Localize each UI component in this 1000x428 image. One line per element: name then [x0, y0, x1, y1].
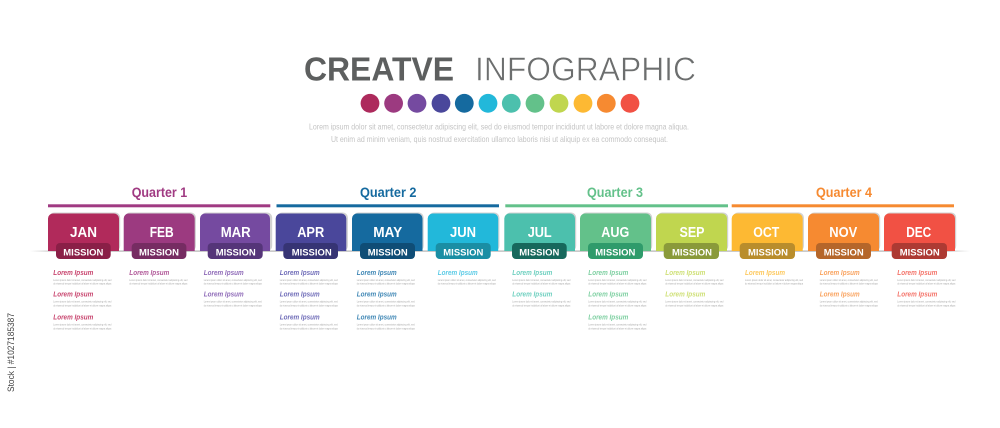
panel: May	[352, 212, 424, 330]
text block: Lorem Ipsum	[357, 268, 397, 277]
text block: do eiusmod tempor incididunt ut labore et dolore magna aliqua	[204, 303, 262, 307]
text block: Lorem Ipsum	[280, 312, 320, 322]
text block: Lorem Ipsum	[665, 268, 706, 277]
text block	[512, 290, 571, 307]
mission badge: MISSION	[292, 248, 332, 259]
month card	[124, 212, 196, 251]
text block: Lorem ipsum dolor sit amet, consectetur adipiscing elit, sed	[53, 323, 112, 327]
text block	[280, 290, 338, 307]
panel: August	[580, 212, 652, 330]
text block: Lorem ipsum dolor sit amet, consectetur adipiscing elit, sed	[745, 278, 803, 282]
text block	[204, 290, 262, 307]
intro paragraph: Ut enim ad minim veniam, quis nostrud exercitation ullamco laboris nisi ut aliquip ex ea commodo consequat.	[331, 134, 668, 144]
mission badge: MISSION	[824, 248, 864, 259]
panel: July	[504, 212, 576, 307]
text block: do eiusmod tempor incididunt ut labore et dolore magna aliqua	[357, 326, 415, 330]
text block: Lorem Ipsum	[357, 290, 397, 298]
text block: do eiusmod tempor incididunt ut labore et dolore magna aliqua	[280, 303, 338, 307]
text block: Lorem ipsum dolor sit amet, consectetur adipiscing elit, sed	[512, 300, 571, 304]
text block: do eiusmod tempor incididunt ut labore et dolore magna aliqua	[897, 282, 956, 286]
month card	[428, 212, 499, 251]
quarter 4 heading: Quarter 4	[816, 184, 872, 200]
text block: do eiusmod tempor incididunt ut labore et dolore magna aliqua	[204, 282, 262, 286]
text block: Lorem Ipsum	[53, 290, 94, 298]
text block: Lorem Ipsum	[357, 312, 397, 322]
text block	[820, 268, 878, 286]
text block	[129, 268, 188, 286]
quarter 4 heading	[732, 184, 954, 207]
text block: Lorem Ipsum	[204, 290, 244, 298]
month name: OCT	[753, 225, 779, 241]
text block: Lorem ipsum dolor sit amet, consectetur adipiscing elit, sed	[129, 278, 188, 282]
text block: do eiusmod tempor incididunt ut labore et dolore magna aliqua	[53, 326, 112, 330]
text block: Lorem ipsum dolor sit amet, consectetur adipiscing elit, sed	[204, 278, 262, 282]
text block: Lorem Ipsum	[512, 290, 553, 298]
text block: do eiusmod tempor incididunt ut labore et dolore magna aliqua	[665, 303, 724, 307]
mission badge: MISSION	[139, 248, 179, 259]
month name: JUL	[528, 225, 552, 241]
text block: Lorem Ipsum	[588, 268, 629, 277]
text block	[588, 312, 647, 330]
text block: Lorem ipsum dolor sit amet, consectetur adipiscing elit, sed	[588, 278, 647, 282]
text block: Lorem ipsum dolor sit amet, consectetur adipiscing elit, sed	[53, 278, 112, 282]
month card	[732, 212, 804, 251]
text block: Lorem Ipsum	[438, 268, 478, 277]
text block: Lorem Ipsum	[53, 268, 94, 277]
text block	[357, 268, 415, 286]
text block: Lorem ipsum dolor sit amet, consectetur adipiscing elit, sed	[53, 300, 112, 304]
text block	[357, 312, 415, 330]
month name: JAN	[70, 225, 97, 241]
month name: DEC	[906, 225, 931, 241]
text block: Lorem Ipsum	[588, 290, 629, 298]
month card	[200, 212, 272, 251]
text block	[665, 268, 724, 286]
text block	[357, 290, 415, 307]
text block: do eiusmod tempor incididunt ut labore et dolore magna aliqua	[53, 282, 112, 286]
panel: June	[428, 212, 499, 286]
month name: MAR	[221, 225, 251, 241]
month card	[884, 212, 956, 251]
month name: JUN	[450, 225, 476, 241]
quarter 1 heading	[48, 184, 270, 207]
intro paragraph	[309, 122, 689, 144]
text block	[53, 290, 112, 307]
panel: December	[884, 212, 956, 307]
text block: Lorem ipsum dolor sit amet, consectetur adipiscing elit, sed	[438, 278, 496, 282]
quarter 2 heading	[276, 184, 499, 207]
month card	[580, 212, 652, 251]
text block: Lorem ipsum dolor sit amet, consectetur adipiscing elit, sed	[204, 300, 262, 304]
text block: do eiusmod tempor incididunt ut labore et dolore magna aliqua	[357, 303, 415, 307]
month name: MAY	[373, 225, 403, 241]
month card	[504, 212, 576, 251]
mission badge: MISSION	[63, 248, 103, 259]
text block	[820, 290, 878, 307]
text block: do eiusmod tempor incididunt ut labore et dolore magna aliqua	[357, 282, 415, 286]
text block: Lorem ipsum dolor sit amet, consectetur adipiscing elit, sed	[357, 323, 415, 327]
mission badge: MISSION	[368, 248, 408, 259]
text block	[53, 268, 112, 286]
text block: do eiusmod tempor incididunt ut labore et dolore magna aliqua	[280, 282, 338, 286]
intro paragraph: Lorem ipsum dolor sit amet, consectetur adipiscing elit, sed do eiusmod tempor incididunt ut labore et dolore magna aliqua.	[309, 122, 689, 132]
stock image credit: Stock | #1027185387	[5, 313, 16, 392]
title	[304, 51, 696, 88]
text block	[512, 268, 571, 286]
text block: Lorem Ipsum	[280, 268, 320, 277]
mission badge: MISSION	[672, 248, 712, 259]
panel: October	[732, 212, 804, 286]
text block	[438, 268, 496, 286]
panel: September	[656, 212, 728, 307]
text block: do eiusmod tempor incididunt ut labore et dolore magna aliqua	[512, 282, 571, 286]
month name: SEP	[680, 225, 705, 241]
text block: Lorem Ipsum	[820, 268, 860, 277]
text block: do eiusmod tempor incididunt ut labore et dolore magna aliqua	[438, 282, 496, 286]
text block: Lorem Ipsum	[512, 268, 553, 277]
panel: February	[124, 212, 196, 286]
text block: Lorem ipsum dolor sit amet, consectetur adipiscing elit, sed	[588, 300, 647, 304]
text block: Lorem ipsum dolor sit amet, consectetur adipiscing elit, sed	[357, 278, 415, 282]
text block	[280, 312, 338, 330]
colour dots row	[361, 94, 639, 113]
quarter 2 heading: Quarter 2	[360, 184, 417, 200]
month card	[276, 212, 348, 251]
timeline baseline	[30, 250, 970, 252]
text block: Lorem Ipsum	[129, 268, 170, 277]
month card	[352, 212, 424, 251]
text block: Lorem Ipsum	[897, 268, 938, 277]
text block	[588, 290, 647, 307]
text block	[665, 290, 724, 307]
text block: do eiusmod tempor incididunt ut labore et dolore magna aliqua	[820, 303, 878, 307]
mission badge: MISSION	[900, 248, 940, 259]
month name: FEB	[150, 225, 174, 241]
text block: Lorem ipsum dolor sit amet, consectetur adipiscing elit, sed	[897, 278, 956, 282]
text block: do eiusmod tempor incididunt ut labore et dolore magna aliqua	[745, 282, 803, 286]
text block: Lorem ipsum dolor sit amet, consectetur adipiscing elit, sed	[280, 300, 338, 304]
text block: do eiusmod tempor incididunt ut labore et dolore magna aliqua	[588, 303, 647, 307]
text block: do eiusmod tempor incididunt ut labore et dolore magna aliqua	[820, 282, 878, 286]
text block: do eiusmod tempor incididunt ut labore et dolore magna aliqua	[512, 303, 571, 307]
mission badge: MISSION	[216, 248, 256, 259]
text block: do eiusmod tempor incididunt ut labore et dolore magna aliqua	[665, 282, 724, 286]
text block	[204, 268, 262, 286]
text block: Lorem ipsum dolor sit amet, consectetur adipiscing elit, sed	[280, 278, 338, 282]
text block: do eiusmod tempor incididunt ut labore et dolore magna aliqua	[129, 282, 188, 286]
month name: AUG	[601, 225, 629, 241]
mission badge: MISSION	[443, 248, 483, 259]
panel: November	[808, 212, 880, 307]
text block: Lorem ipsum dolor sit amet, consectetur adipiscing elit, sed	[820, 300, 878, 304]
text block	[588, 268, 647, 286]
text block: do eiusmod tempor incididunt ut labore et dolore magna aliqua	[588, 326, 647, 330]
text block: Lorem Ipsum	[745, 268, 785, 277]
text block: Lorem Ipsum	[53, 312, 94, 322]
quarter 1 heading: Quarter 1	[132, 184, 187, 200]
text block: Lorem Ipsum	[897, 290, 938, 298]
month card	[808, 212, 880, 251]
text block: Lorem Ipsum	[204, 268, 244, 277]
panel: March	[200, 212, 272, 307]
text block	[745, 268, 803, 286]
text block	[280, 268, 338, 286]
text block: Lorem ipsum dolor sit amet, consectetur adipiscing elit, sed	[897, 300, 956, 304]
text block: Lorem ipsum dolor sit amet, consectetur adipiscing elit, sed	[820, 278, 878, 282]
text block	[53, 312, 112, 330]
text block: Lorem ipsum dolor sit amet, consectetur adipiscing elit, sed	[665, 278, 724, 282]
month card	[48, 212, 120, 251]
title: INFOGRAPHIC	[475, 51, 696, 88]
title: CREATVE	[304, 51, 454, 88]
text block: Lorem ipsum dolor sit amet, consectetur adipiscing elit, sed	[512, 278, 571, 282]
text block	[897, 268, 956, 286]
text block: Lorem ipsum dolor sit amet, consectetur adipiscing elit, sed	[280, 323, 338, 327]
mission badge: MISSION	[748, 248, 788, 259]
text block: Lorem ipsum dolor sit amet, consectetur adipiscing elit, sed	[588, 323, 647, 327]
month name: NOV	[829, 225, 858, 241]
text block: Lorem ipsum dolor sit amet, consectetur adipiscing elit, sed	[665, 300, 724, 304]
quarter 3 heading: Quarter 3	[587, 184, 643, 200]
text block: do eiusmod tempor incididunt ut labore et dolore magna aliqua	[280, 326, 338, 330]
text block: do eiusmod tempor incididunt ut labore et dolore magna aliqua	[53, 303, 112, 307]
text block	[897, 290, 956, 307]
text block: Lorem Ipsum	[588, 312, 629, 322]
text block: do eiusmod tempor incididunt ut labore et dolore magna aliqua	[588, 282, 647, 286]
month name: APR	[297, 225, 325, 241]
mission badge: MISSION	[519, 248, 559, 259]
month card	[656, 212, 728, 251]
panel: January	[48, 212, 120, 330]
mission badge: MISSION	[595, 248, 635, 259]
text block: Lorem Ipsum	[665, 290, 706, 298]
panel: April	[276, 212, 348, 330]
text block: Lorem ipsum dolor sit amet, consectetur adipiscing elit, sed	[357, 300, 415, 304]
quarter 3 heading	[505, 184, 728, 207]
text block: do eiusmod tempor incididunt ut labore et dolore magna aliqua	[897, 303, 956, 307]
text block: Lorem Ipsum	[820, 290, 860, 298]
text block: Lorem Ipsum	[280, 290, 320, 298]
